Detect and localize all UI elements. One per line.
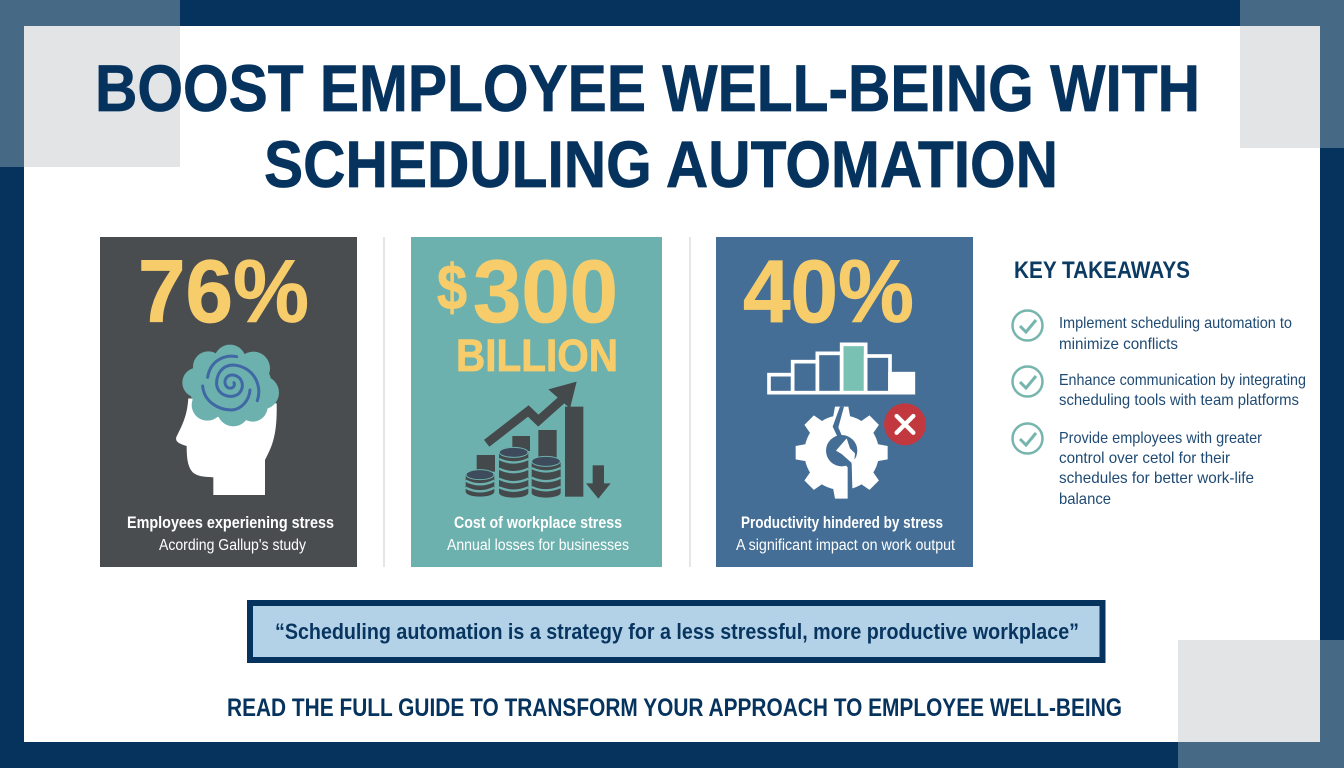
caption: Acording Gallup's study: [159, 537, 306, 554]
takeaway 1: minimize conflicts: [1059, 336, 1178, 353]
statistic: $300 billion: [437, 241, 618, 381]
caption: [736, 514, 956, 554]
panel: employees experiencing stress: [100, 237, 357, 567]
caption: [447, 514, 629, 554]
title: BOOST EMPLOYEE WELL-BEING WITH: [95, 51, 1200, 125]
takeaway 3: Provide employees with greater: [1059, 430, 1263, 447]
icon: bar chart: [769, 344, 913, 393]
takeaway 3: balance: [1059, 491, 1111, 508]
call to action: READ THE FULL GUIDE TO TRANSFORM YOUR APPROACH TO EMPLOYEE WELL-BEING: [227, 694, 1122, 722]
corner accent: top right: [1240, 0, 1344, 148]
title: [95, 51, 1200, 201]
caption: A significant impact on work output: [736, 537, 956, 554]
caption: [127, 514, 334, 554]
panel: productivity hindered: [716, 237, 973, 567]
quote banner: “Scheduling automation is a strategy for a less stressful, more productive workplace”: [275, 619, 1079, 644]
icon: broken gear with error badge: [796, 403, 926, 500]
corner accent: bottom right: [1178, 640, 1344, 768]
icon: head with spiral cloud: [176, 345, 279, 495]
caption: Employees experiening stress: [127, 514, 334, 532]
quote banner: [250, 603, 1102, 660]
takeaway 2: Enhance communication by integrating: [1059, 372, 1306, 389]
divider: [383, 237, 385, 567]
takeaway 3: schedules for better work-life: [1059, 470, 1254, 487]
key takeaways: [1012, 257, 1306, 508]
caption: Annual losses for businesses: [447, 537, 629, 554]
caption: Cost of workplace stress: [454, 514, 622, 532]
takeaway 2: scheduling tools with team platforms: [1059, 392, 1299, 409]
statistic: $300 billion: 300: [473, 241, 618, 341]
error badge: [884, 403, 926, 445]
heading: KEY TAKEAWAYS: [1014, 257, 1190, 284]
takeaway 1: Implement scheduling automation to: [1059, 315, 1292, 332]
caption: Productivity hindered by stress: [741, 514, 943, 532]
title: SCHEDULING AUTOMATION: [264, 127, 1058, 201]
panel: cost of workplace stress: [411, 237, 662, 567]
coin stack 3: [532, 456, 561, 498]
takeaway 3: [1012, 424, 1263, 508]
statistic: $300 billion: $: [437, 251, 467, 323]
corner accent: top left: [0, 0, 180, 167]
icon: rising chart with coin stacks: [466, 382, 611, 499]
coin stack 2: [499, 447, 528, 498]
statistic: 76%: 76%: [138, 241, 309, 341]
takeaway 1: [1012, 310, 1292, 353]
statistic: 40%: 40%: [743, 241, 914, 341]
takeaway 2: [1012, 366, 1306, 409]
divider: [689, 237, 691, 567]
coin stack 1: [466, 470, 494, 497]
statistic: $300 billion: BILLION: [456, 330, 618, 381]
takeaway 3: control over cetol for their: [1059, 450, 1231, 467]
